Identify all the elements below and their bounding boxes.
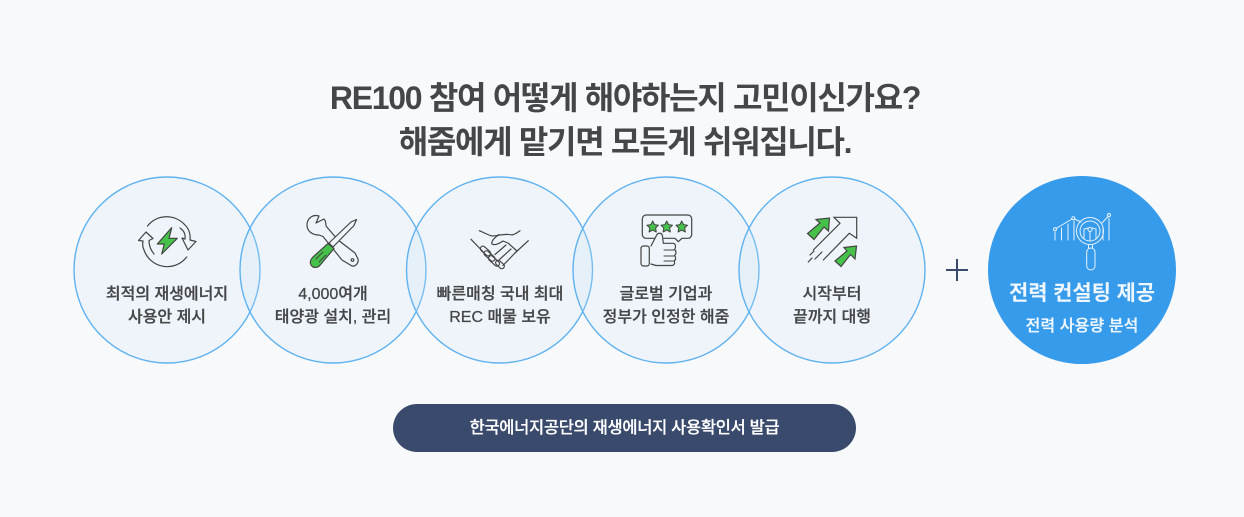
panel: circle 5 (739, 177, 925, 363)
text: circle 1: 사용안 제시 (128, 309, 206, 326)
icon: thumbs up rating (641, 215, 692, 266)
icon: plus (946, 259, 968, 281)
title: 해줌에게 맡기면 모든게 쉬워집니다. (399, 124, 851, 160)
text: circle 3: REC 매물 보유 (449, 309, 551, 326)
text: blue circle heading: 전력 컨설팅 제공 (1009, 282, 1155, 305)
text: circle 2 (275, 285, 391, 326)
title: RE100 참여 어떻게 해야하는지 고민이신가요? (330, 80, 920, 116)
icon: wrench and screwdriver (307, 216, 358, 267)
text: circle 4: 글로벌 기업과 (620, 286, 712, 303)
panel: circle 4 (573, 177, 759, 363)
title (330, 80, 920, 160)
text: circle 1 (106, 285, 228, 326)
text: circle 4 (603, 285, 729, 326)
text: circle 5: 끝까지 대행 (793, 309, 871, 326)
panel: blue circle (988, 176, 1176, 364)
text: circle 1: 최적의 재생에너지 (106, 286, 228, 303)
icon: growth arrows (808, 217, 857, 266)
text: blue circle subheading: 전력 사용량 분석 (1026, 318, 1138, 335)
icon: handshake (471, 231, 528, 270)
text: circle 4: 정부가 인정한 해줌 (603, 309, 729, 326)
panel: circle 1 (74, 177, 260, 363)
panel: circle 3 (406, 177, 592, 363)
text: circle 3: 빠른매칭 국내 최대 (437, 286, 563, 303)
text: circle 3 (437, 285, 563, 326)
text: circle 5 (793, 285, 871, 326)
text: circle 5: 시작부터 (803, 286, 861, 303)
text: circle 2: 4,000여개 (298, 286, 368, 303)
certificate pill (393, 404, 856, 452)
panel: circle 2 (240, 177, 426, 363)
text: circle 2: 태양광 설치, 관리 (275, 309, 391, 326)
icon: energy cycle (138, 217, 196, 267)
certificate pill: 한국에너지공단의 재생에너지 사용확인서 발급 (470, 419, 779, 437)
icon: magnifier chart (1054, 214, 1110, 270)
